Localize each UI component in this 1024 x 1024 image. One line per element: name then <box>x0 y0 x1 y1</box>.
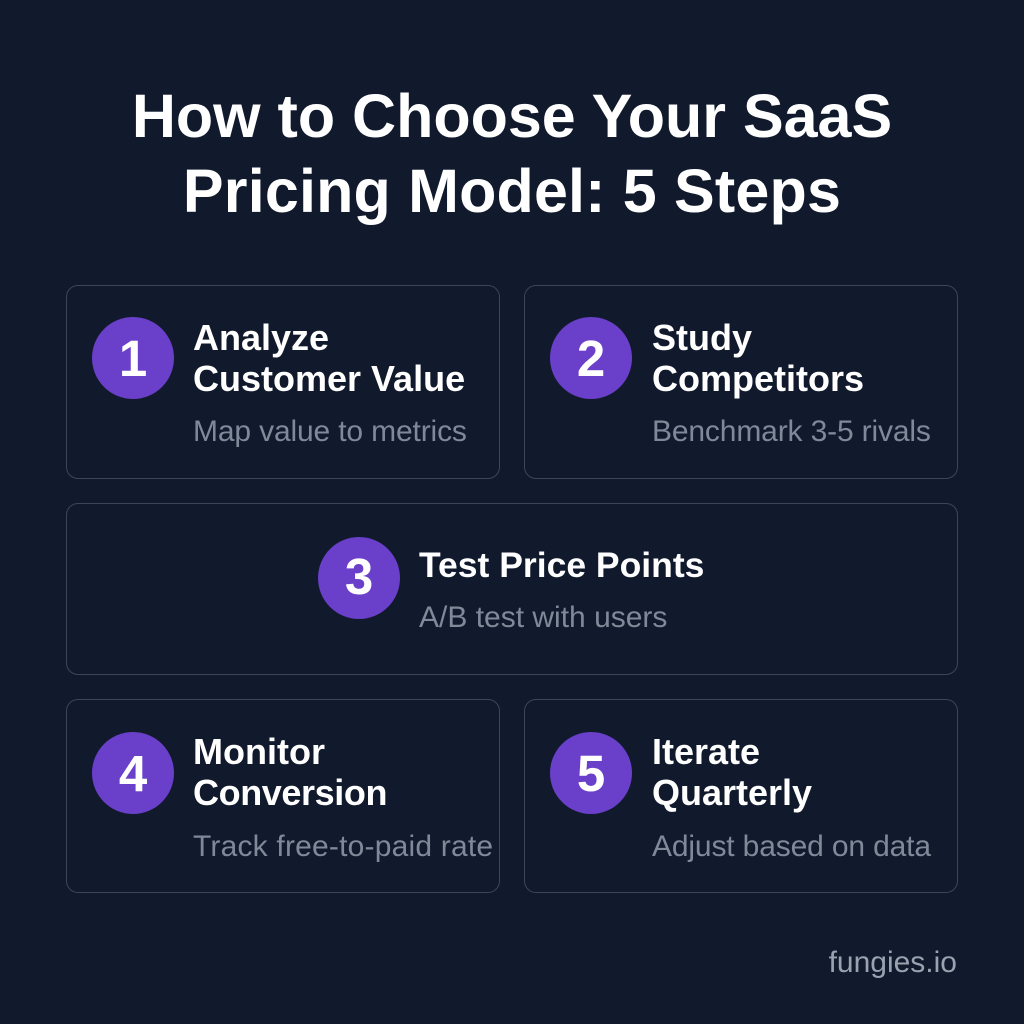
icon: number 2 <box>550 317 632 399</box>
heading: step 2: Competitors <box>652 358 864 399</box>
text: step 3 description: A/B test with users <box>419 601 667 634</box>
heading: step 2: Study <box>652 317 752 358</box>
heading: step 4: Monitor <box>193 731 325 772</box>
heading: step 4: Conversion <box>193 772 387 813</box>
panel: step 5 <box>524 699 958 893</box>
heading: step 1: Analyze <box>193 317 329 358</box>
heading: step 5 <box>652 731 812 813</box>
title: How to Choose Your SaaS <box>132 82 892 150</box>
icon: number 1 <box>92 317 174 399</box>
icon: number 4 <box>92 732 174 814</box>
heading: step 1 <box>193 317 465 399</box>
brand label: fungies.io <box>829 946 957 979</box>
heading: step 3: Test Price Points <box>419 545 704 585</box>
panel: step 3 <box>66 503 958 675</box>
text: step 4 description: Track free-to-paid rate <box>193 830 493 863</box>
icon: number 3 <box>318 537 400 619</box>
icon: number 5 <box>550 732 632 814</box>
icon: number 2: 2 <box>577 330 605 387</box>
heading: step 5: Iterate <box>652 731 760 772</box>
icon: number 4: 4 <box>119 745 147 802</box>
panel: step 1 <box>66 285 500 479</box>
icon: number 5: 5 <box>577 745 605 802</box>
heading: step 2 <box>652 317 864 399</box>
title <box>132 82 892 225</box>
title: Pricing Model: 5 Steps <box>183 157 841 225</box>
text: step 5 description: Adjust based on data <box>652 830 931 863</box>
panel: step 2 <box>524 285 958 479</box>
icon: number 3: 3 <box>345 548 373 605</box>
heading: step 1: Customer Value <box>193 358 465 399</box>
heading: step 4 <box>193 731 387 813</box>
text: step 1 description: Map value to metrics <box>193 415 467 448</box>
panel: step 4 <box>66 699 500 893</box>
heading: step 5: Quarterly <box>652 772 812 813</box>
icon: number 1: 1 <box>119 330 147 387</box>
text: step 2 description: Benchmark 3-5 rivals <box>652 415 931 448</box>
